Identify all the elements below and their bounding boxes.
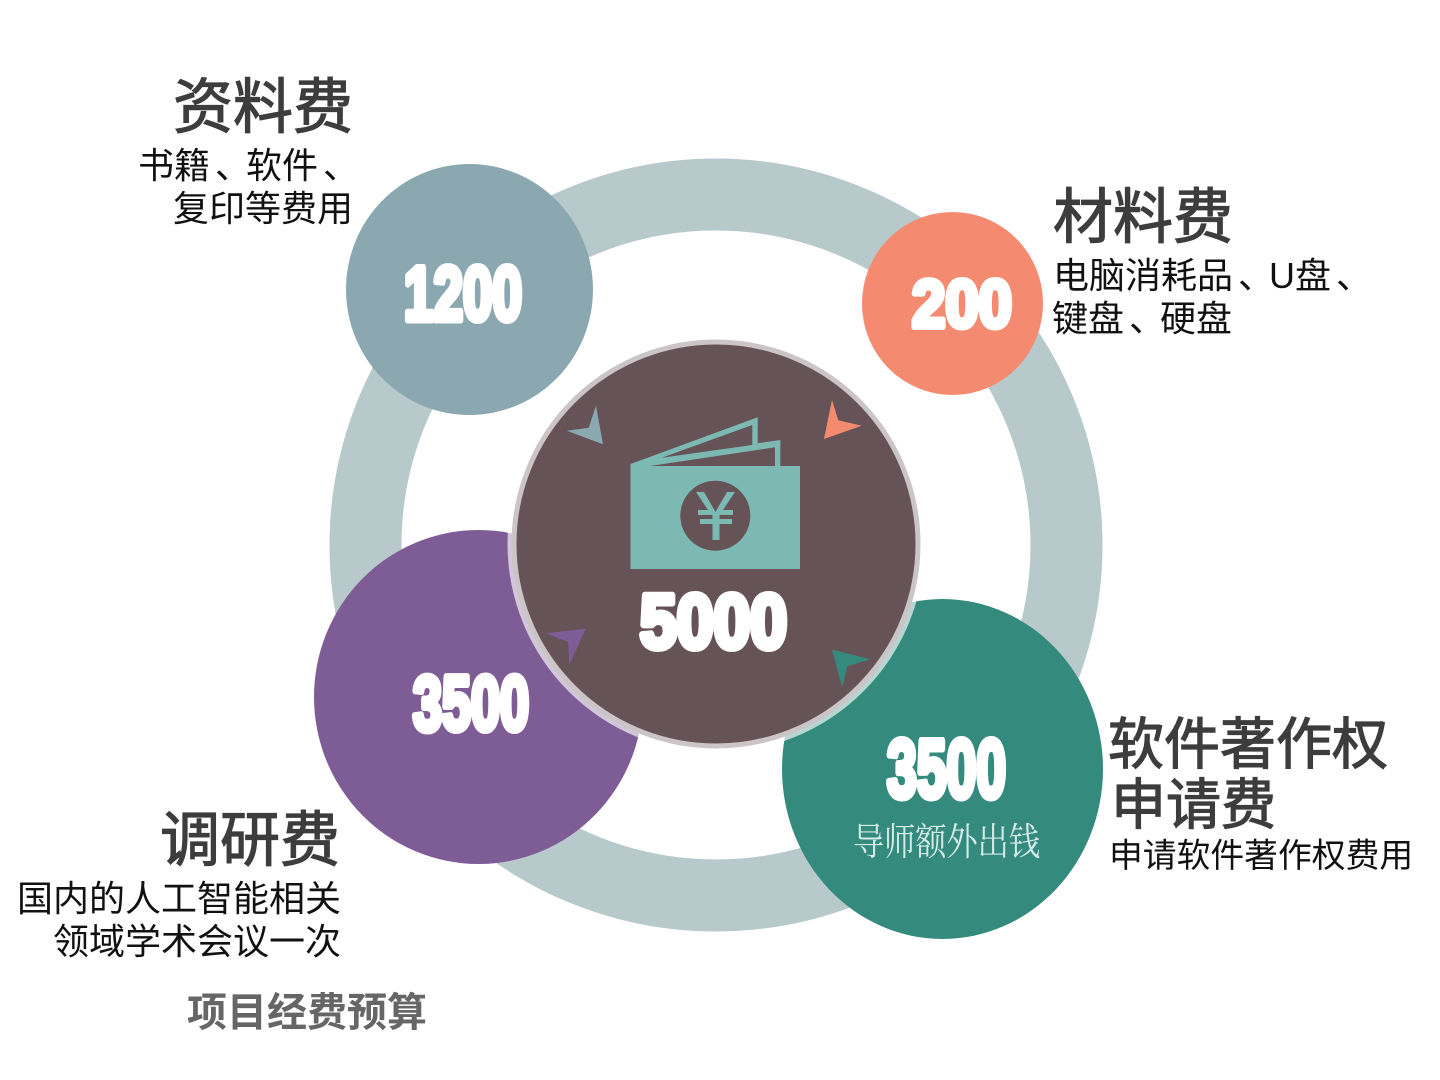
yen glyph — [696, 492, 735, 540]
circle: supplies cost 200: 200 — [912, 267, 1012, 342]
label: copyright: 申请费 — [1111, 774, 1276, 836]
label: supplies: 电脑消耗品、U盘、 — [1053, 255, 1372, 296]
icon: wallet with yen — [630, 417, 800, 569]
label: research: 国内的人工智能相关 — [17, 878, 341, 919]
circle: copyright cost 3500: 3500 — [887, 722, 1006, 815]
outer ring — [366, 194, 1066, 896]
note: paid by advisor: 导师额外出钱 — [853, 811, 1040, 866]
label: reference materials — [138, 74, 359, 229]
arrow: orange — [824, 400, 862, 439]
circle: materials cost 1200: 1200 — [404, 252, 522, 337]
label: supplies: 材料费 — [1053, 184, 1233, 251]
circle: supplies cost 200 — [862, 212, 1043, 395]
circle: materials cost 1200 — [346, 164, 593, 415]
label: copyright — [1108, 713, 1413, 875]
circle: copyright cost 3500 — [782, 599, 1103, 939]
circle: research cost 3500 — [314, 530, 643, 864]
label: research: 领域学术会议一次 — [53, 921, 341, 962]
center circle halo — [508, 336, 924, 752]
label: supplies — [1052, 184, 1372, 339]
circle: research cost 3500: 3500 — [413, 661, 529, 747]
label: reference materials: 复印等费用 — [173, 188, 353, 229]
label: supplies: 键盘、硬盘 — [1052, 298, 1232, 339]
center circle: total 5000 — [514, 342, 918, 746]
arrow: purple — [546, 629, 586, 665]
caption: project budget: 项目经费预算 — [187, 991, 427, 1035]
label: research — [17, 807, 341, 962]
total amount: 5000 — [640, 580, 787, 665]
label: research: 调研费 — [160, 807, 340, 874]
label: copyright: 申请软件著作权费用 — [1109, 837, 1413, 875]
arrow: green — [832, 650, 870, 687]
label: reference materials: 书籍、软件、 — [138, 145, 359, 186]
arrow: blue — [567, 406, 603, 444]
label: reference materials: 资料费 — [173, 74, 353, 141]
label: copyright: 软件著作权 — [1108, 713, 1388, 776]
